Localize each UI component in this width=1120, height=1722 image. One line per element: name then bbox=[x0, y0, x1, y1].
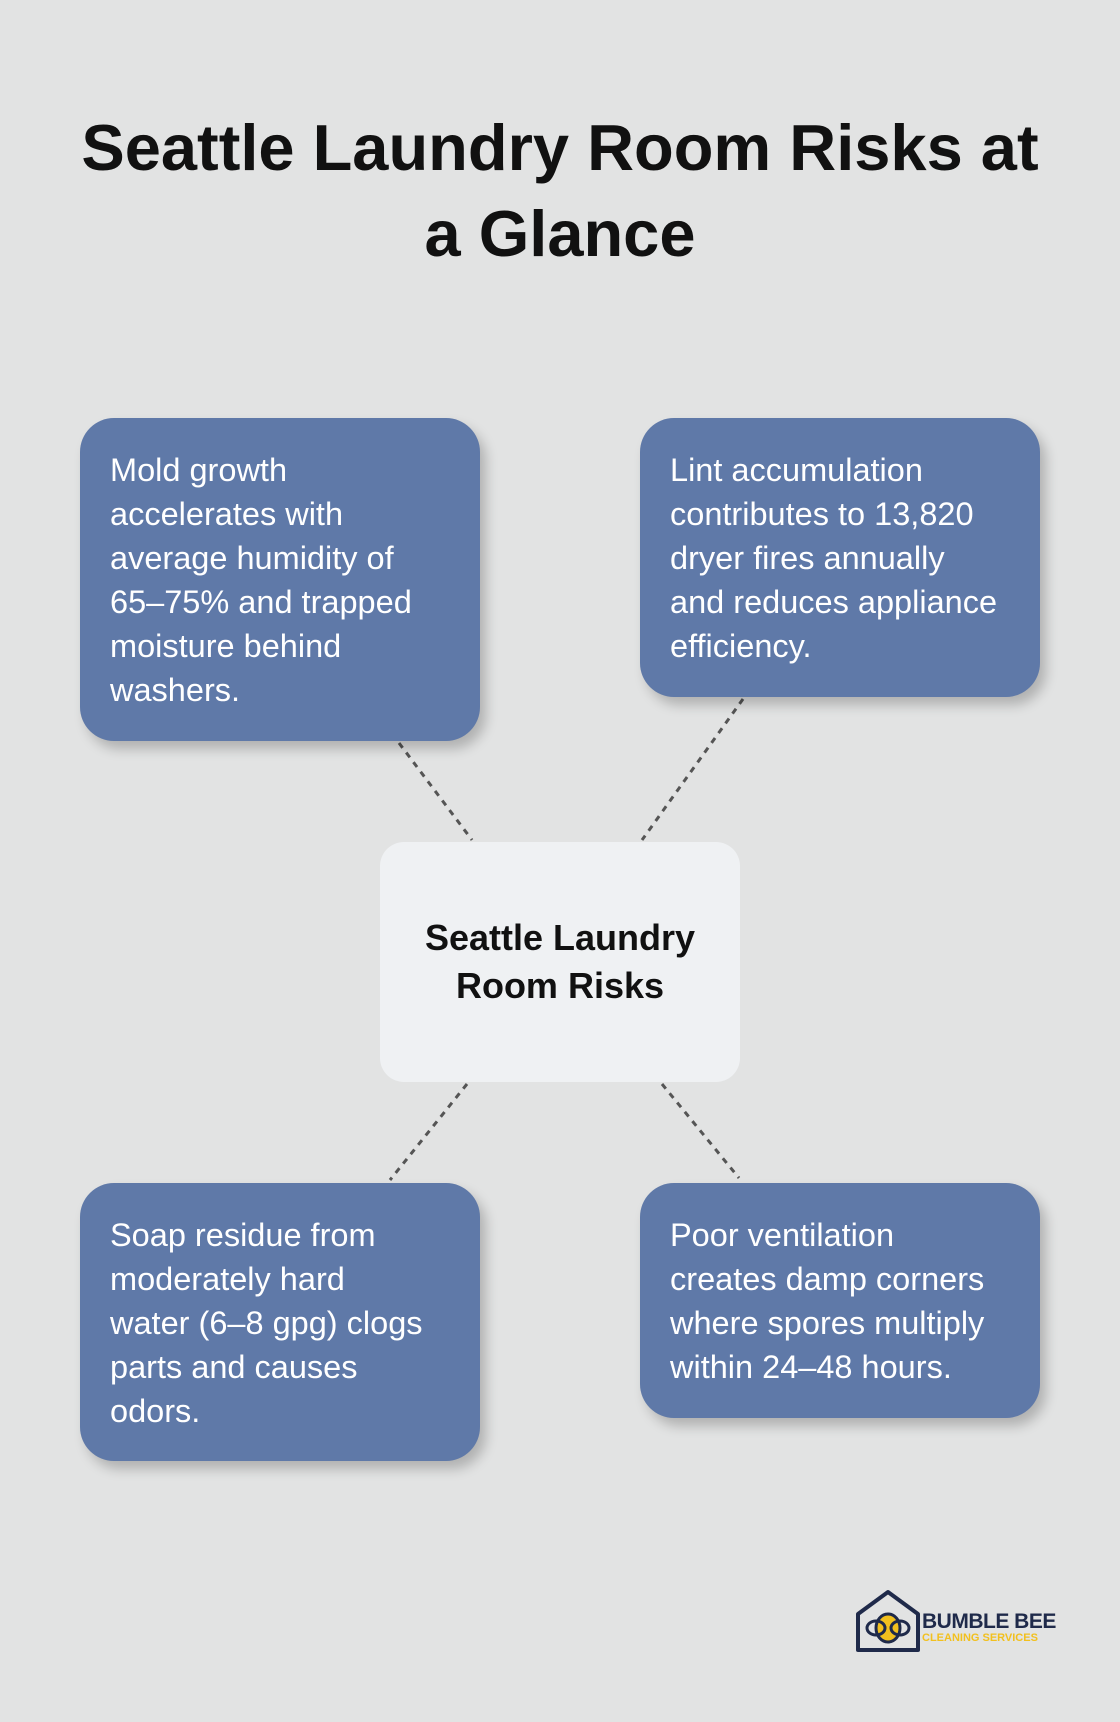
title bbox=[81, 111, 1039, 270]
panel: lint accumulation: and reduces appliance bbox=[670, 584, 997, 620]
panel: lint accumulation: Lint accumulation bbox=[670, 452, 923, 488]
logo bbox=[856, 1590, 1056, 1652]
panel: soap residue bbox=[80, 1183, 480, 1461]
center node: Seattle Laundry bbox=[425, 917, 695, 958]
panel: soap residue: water (6–8 gpg) clogs bbox=[110, 1305, 423, 1341]
panel: mold growth: moisture behind bbox=[110, 628, 341, 664]
panel: lint accumulation: efficiency. bbox=[670, 628, 812, 664]
icon: bee house bbox=[856, 1590, 920, 1652]
center node: Room Risks bbox=[456, 965, 664, 1006]
panel: poor ventilation: where spores multiply bbox=[670, 1305, 984, 1341]
panel: poor ventilation bbox=[640, 1183, 1040, 1418]
panel: mold growth: accelerates with bbox=[110, 496, 343, 532]
title: a Glance bbox=[424, 197, 695, 270]
panel: lint accumulation: dryer fires annually bbox=[670, 540, 945, 576]
panel: poor ventilation: Poor ventilation bbox=[670, 1217, 894, 1253]
panel: soap residue: Soap residue from bbox=[110, 1217, 376, 1253]
panel: soap residue: moderately hard bbox=[110, 1261, 345, 1297]
center node bbox=[380, 842, 740, 1082]
panel: lint accumulation: contributes to 13,820 bbox=[670, 496, 974, 532]
panel: lint accumulation bbox=[640, 418, 1040, 697]
panel: mold growth: washers. bbox=[110, 672, 240, 708]
logo text bbox=[922, 1610, 1056, 1644]
panel: mold growth bbox=[80, 418, 480, 741]
logo text: CLEANING SERVICES bbox=[922, 1632, 1038, 1644]
panel: soap residue: parts and causes bbox=[110, 1349, 358, 1385]
panel: mold growth: Mold growth bbox=[110, 452, 287, 488]
panel: soap residue: odors. bbox=[110, 1393, 200, 1429]
panel: poor ventilation: within 24–48 hours. bbox=[670, 1349, 952, 1385]
panel: mold growth: 65–75% and trapped bbox=[110, 584, 412, 620]
title: Seattle Laundry Room Risks at bbox=[81, 111, 1039, 184]
panel: mold growth: average humidity of bbox=[110, 540, 394, 576]
logo text: BUMBLE BEE bbox=[922, 1610, 1056, 1633]
panel: poor ventilation: creates damp corners bbox=[670, 1261, 984, 1297]
